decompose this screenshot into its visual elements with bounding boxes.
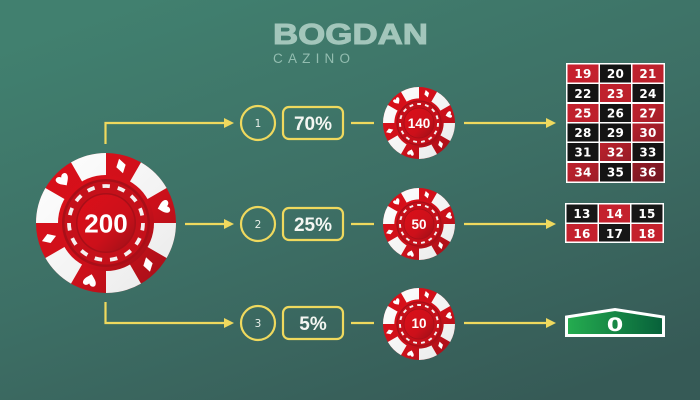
chip 10 (383, 288, 455, 360)
roulette table: 19 to 36: 20 (607, 67, 624, 81)
chip 10: 10 (411, 316, 427, 331)
logo: BOGDAN (273, 19, 428, 51)
roulette table: 13 to 18: 17 (606, 227, 623, 241)
percentage 25%: 25% (294, 215, 332, 236)
chip 50: 50 (411, 217, 427, 232)
roulette table: 19 to 36: 31 (574, 146, 592, 160)
roulette table: 19 to 36: 30 (639, 126, 657, 140)
roulette table: 13 to 18: 15 (638, 207, 656, 221)
roulette table: 13 to 18: 14 (606, 207, 623, 221)
arrow to table (464, 219, 556, 229)
logo: CAZINO (273, 51, 350, 66)
number badge 1 (241, 106, 275, 140)
roulette table: 13 to 18: 13 (573, 207, 591, 221)
number badge 3 (241, 306, 275, 340)
roulette table: 19 to 36: 24 (639, 87, 657, 101)
roulette table: 19 to 36: 29 (607, 126, 624, 140)
arrow: middle branch (185, 219, 234, 229)
number badge 1: 1 (255, 118, 261, 130)
roulette table: 13 to 18: 18 (638, 227, 656, 241)
connector (351, 122, 374, 124)
percentage 70% (283, 107, 343, 139)
arrow: top branch (106, 118, 234, 144)
roulette table: 19 to 36: 19 (574, 67, 592, 81)
roulette table: 19 to 36: 23 (607, 87, 624, 101)
arrow: bottom branch (106, 302, 234, 328)
chip 50 (383, 188, 455, 260)
roulette table: 19 to 36: 33 (639, 146, 657, 160)
percentage 25% (283, 208, 343, 240)
large chip: 200: 200 (84, 208, 128, 238)
logo (273, 19, 428, 66)
row 1 (241, 87, 556, 159)
percentage 5%: 5% (299, 314, 327, 335)
roulette table: 19 to 36: 26 (607, 106, 624, 120)
roulette table: 19 to 36: 32 (607, 146, 624, 160)
roulette table: 13 to 18: 16 (573, 227, 591, 241)
chip 140 (383, 87, 455, 159)
arrow to table (464, 118, 556, 128)
arrow to zero (464, 318, 556, 328)
roulette table: 19 to 36: 35 (607, 166, 624, 180)
roulette table: 19 to 36: 21 (639, 67, 657, 81)
row 3 (241, 288, 556, 360)
row 2 (241, 188, 556, 260)
roulette table: 13 to 18 (565, 203, 664, 243)
roulette table: 19 to 36: 34 (574, 166, 592, 180)
connector (351, 322, 374, 324)
large chip: 200 (36, 153, 176, 293)
roulette table: 19 to 36: 22 (574, 87, 592, 101)
roulette table: 19 to 36 (566, 63, 665, 183)
number badge 2 (241, 207, 275, 241)
zero pocket (566, 310, 664, 336)
roulette table: 19 to 36: 27 (639, 106, 657, 120)
number badge 3: 3 (255, 318, 261, 330)
roulette table: 19 to 36: 28 (574, 126, 592, 140)
percentage 70%: 70% (294, 114, 332, 135)
zero pocket: 0 (607, 314, 623, 336)
roulette table: 19 to 36: 36 (639, 166, 657, 180)
number badge 2: 2 (255, 219, 261, 231)
connector (351, 223, 374, 225)
percentage 5% (283, 307, 343, 339)
chip 140: 140 (408, 116, 430, 131)
roulette table: 19 to 36: 25 (574, 106, 592, 120)
